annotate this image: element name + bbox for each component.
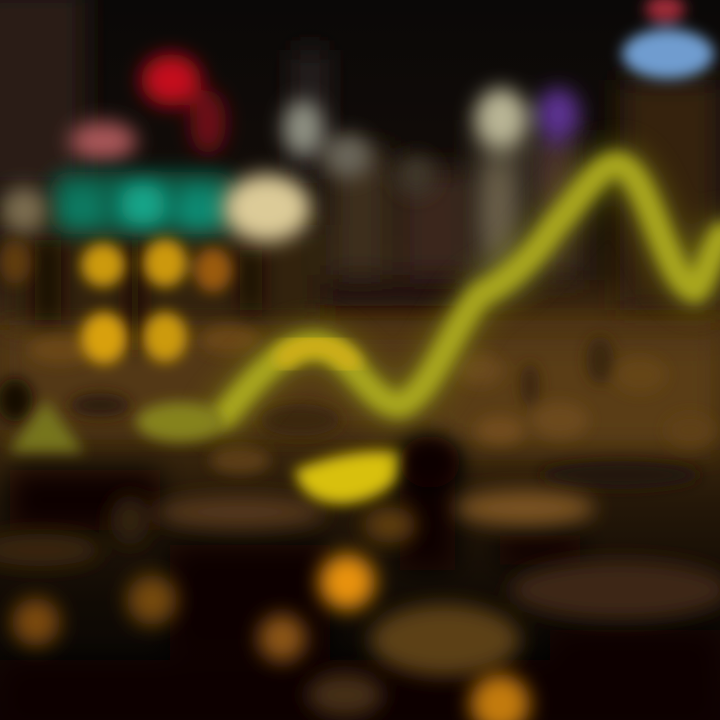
lower brown patches xyxy=(0,490,720,717)
buildings: left tower and skyline silhouettes xyxy=(0,0,720,325)
bright crest on line xyxy=(285,346,350,362)
warm ground band xyxy=(0,330,720,450)
yellow-green rising line xyxy=(225,165,720,415)
bright yellow bar xyxy=(295,451,405,504)
yellow windows xyxy=(0,239,232,364)
dark vertical streaks xyxy=(35,240,262,350)
dark foreground shapes xyxy=(0,450,720,720)
red sign xyxy=(69,54,226,161)
teal sign row xyxy=(50,172,235,234)
yellow-green rising line glow xyxy=(225,165,720,415)
cream dome xyxy=(0,174,311,242)
dark shape next to bar xyxy=(400,436,460,488)
orange lights at the bottom xyxy=(12,554,530,720)
pale tower lights xyxy=(283,88,580,260)
blue dome and red top xyxy=(622,0,714,79)
ground texture mottling xyxy=(0,326,714,489)
line start mounds xyxy=(8,400,224,452)
